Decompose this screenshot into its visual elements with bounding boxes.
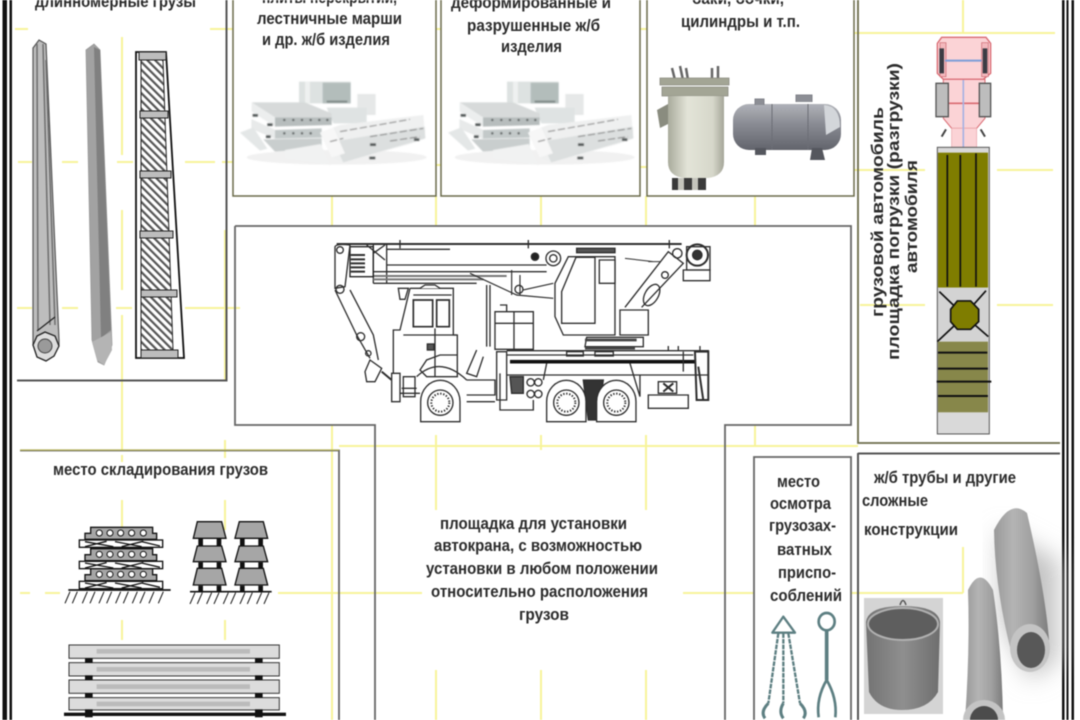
image: vertical tank (657, 66, 729, 190)
icon: hatched column (136, 52, 184, 358)
image: concrete ring (864, 598, 943, 714)
text: sling inspection label: соблений (770, 587, 842, 605)
panel: crane platform (235, 226, 851, 720)
panel: damaged products (441, 0, 640, 196)
icon: stacked long planks (64, 645, 286, 717)
text: truck label: грузовой автомобиль (869, 107, 887, 317)
panel: pipes (858, 453, 1060, 720)
truck bed (937, 147, 989, 434)
panel: long loads (17, 0, 226, 380)
text: sling inspection label: приспо- (778, 564, 836, 582)
illustration: truck crane (335, 240, 710, 422)
image: concrete products (240, 82, 427, 165)
panel: storage area (20, 450, 339, 720)
icon: truck plan view (936, 37, 991, 434)
text: sling inspection label: осмотра (770, 495, 832, 513)
text: sling inspection label: место (777, 473, 820, 491)
truck cab (392, 285, 457, 402)
outrigger and chassis (467, 285, 708, 420)
text: sling inspection label: ватных (777, 541, 833, 559)
truck cab (936, 37, 991, 152)
text: damaged label: изделия (501, 38, 562, 56)
text: crane platform label: автокрана, с возможностью (434, 537, 642, 555)
text: sling inspection label (769, 473, 842, 605)
hook strut (335, 290, 392, 382)
text: damaged label (451, 0, 611, 56)
text: pipes label: сложные (862, 492, 928, 510)
text: tanks label: цилиндры и т.п. (681, 13, 800, 31)
icon: stacked hollow slabs (65, 527, 171, 603)
text: crane platform label (426, 515, 658, 624)
wheels (417, 367, 636, 422)
icon: square pillar (86, 44, 112, 365)
lift arm (470, 244, 710, 308)
panel: tanks (647, 0, 854, 196)
load: pipes (938, 153, 988, 288)
panel: sling inspection (754, 457, 851, 720)
image: damaged concrete products (448, 82, 635, 165)
text: crane platform label: грузов (519, 606, 569, 624)
load: round tank (937, 288, 988, 342)
text: pipes label: ж/б трубы и другие (873, 469, 1016, 487)
text: tanks label (681, 0, 800, 31)
text: pipes label (862, 469, 1016, 539)
text: truck label (869, 63, 921, 360)
icon: round pillar (33, 40, 59, 361)
operator cabin (555, 248, 648, 348)
heading: storage area: место складирования грузов (53, 461, 268, 479)
text: pipes label: конструкции (864, 521, 958, 539)
boom (335, 240, 682, 293)
image: concrete pipes (963, 508, 1058, 720)
image: horizontal tank (733, 95, 841, 160)
panel: floor slabs (233, 0, 436, 196)
icon: loop sling (818, 613, 836, 717)
text: crane platform label: установки в любом положении (426, 560, 658, 578)
text: damaged label: разрушенные ж/б (467, 17, 600, 35)
text: sling inspection label: грузозах- (769, 517, 836, 535)
text: crane platform label: относительно расположения (431, 583, 648, 601)
text: slabs label: лестничные марши (257, 10, 402, 28)
panel: truck area (858, 0, 1060, 443)
icon: stacked blocks (190, 522, 272, 604)
text: slabs label (257, 0, 402, 49)
text: crane platform label: площадка для установки (440, 515, 627, 533)
text: truck label: площадка погрузки (разгрузки) (885, 63, 903, 360)
text: truck label: автомобиля (903, 160, 921, 273)
load: slabs (937, 342, 991, 412)
text: slabs label: и др. ж/б изделия (262, 31, 390, 49)
icon: four-leg sling (763, 617, 805, 718)
